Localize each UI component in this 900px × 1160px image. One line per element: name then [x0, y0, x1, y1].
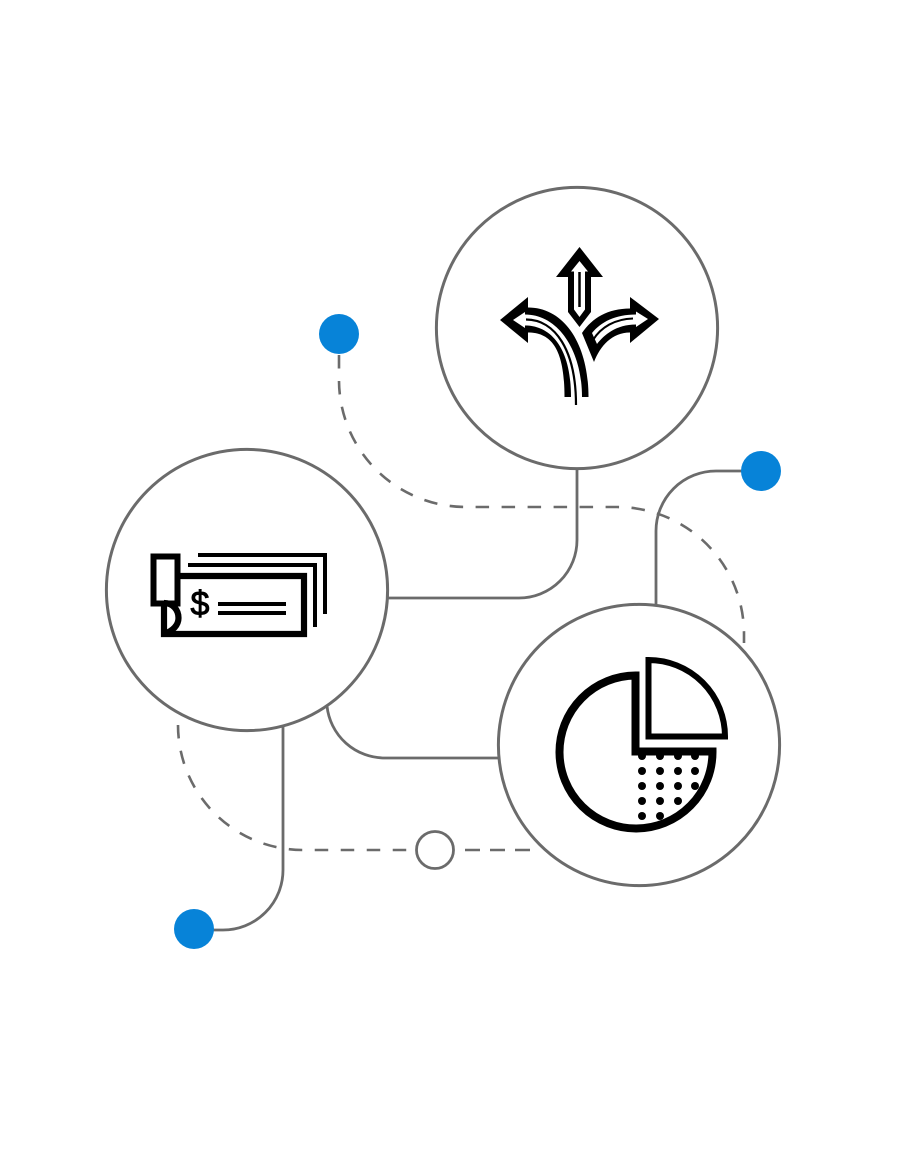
small hollow node: [416, 832, 454, 868]
blue dot: right: [741, 451, 781, 491]
connector: pie circle to right blue dot: [656, 471, 745, 604]
icon: diverging arrows: [500, 247, 659, 405]
icon: stack of cheques: [154, 555, 325, 634]
blue dot: top: [319, 314, 359, 354]
connector: left circle to pie circle: [327, 706, 498, 758]
icon: pie chart: [560, 660, 725, 828]
dollar sign: $: [191, 585, 210, 623]
dashed connector: small circle to pie circle: [465, 849, 535, 851]
circle: left: [106, 449, 388, 731]
connector: top circle to left circle: [388, 468, 577, 598]
dashed connector: top blue dot to pie circle: [339, 355, 744, 643]
blue dot: bottom: [174, 909, 214, 949]
dashed connector: left circle to small circle: [178, 725, 420, 850]
circle: top: [436, 187, 718, 469]
circle: pie: [498, 604, 780, 886]
connector: left circle to bottom blue dot: [200, 727, 283, 930]
